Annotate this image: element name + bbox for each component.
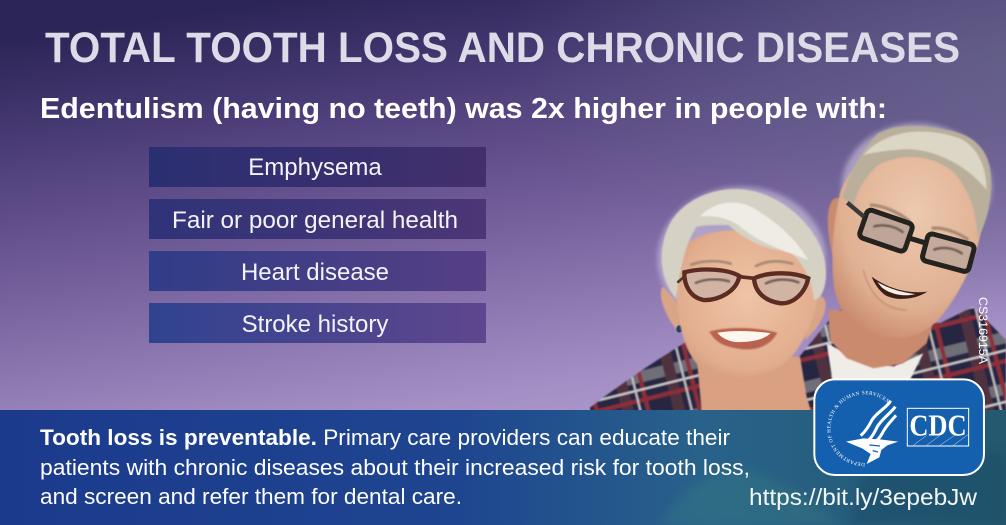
message line 2: patients with chronic diseases about their increased risk for tooth loss,	[40, 455, 750, 480]
url: https://bit.ly/3epebJw	[749, 484, 978, 510]
HHS seal	[827, 390, 898, 466]
condition list	[149, 147, 486, 343]
man's eyebrows	[870, 205, 968, 240]
photo: smiling older couple	[563, 123, 1006, 430]
soft glow around the couple	[658, 123, 992, 330]
bottom band	[0, 410, 1006, 525]
item: emphysema	[149, 147, 486, 187]
message line 1: Tooth loss is preventable. Primary care providers can educate their	[40, 425, 730, 450]
item: stroke history: Stroke history	[242, 311, 388, 338]
photo code: CS316915A	[976, 297, 988, 364]
item: heart disease	[149, 251, 486, 291]
item: fair or poor general health: Fair or poor general health	[172, 207, 458, 234]
item: stroke history	[149, 303, 486, 343]
woman	[563, 189, 826, 430]
man's glasses	[847, 203, 975, 272]
item: heart disease: Heart disease	[241, 259, 389, 286]
item: emphysema: Emphysema	[248, 154, 382, 181]
item: fair or poor general health	[149, 199, 486, 239]
woman's glasses	[677, 270, 808, 303]
subtitle: Edentulism (having no teeth) was 2x higher in people with:	[40, 93, 887, 125]
message line 3: and screen and refer them for dental care.	[40, 484, 462, 509]
logo panel: HHS and CDC	[813, 378, 985, 476]
CDC mark: CDC	[909, 409, 967, 443]
bottom message	[40, 425, 750, 509]
man	[783, 126, 1006, 430]
title: TOTAL TOOTH LOSS AND CHRONIC DISEASES	[45, 24, 960, 72]
HHS seal: DEPARTMENT OF HEALTH & HUMAN SERVICES·USA	[827, 390, 889, 466]
woman's eyebrows	[690, 261, 793, 267]
